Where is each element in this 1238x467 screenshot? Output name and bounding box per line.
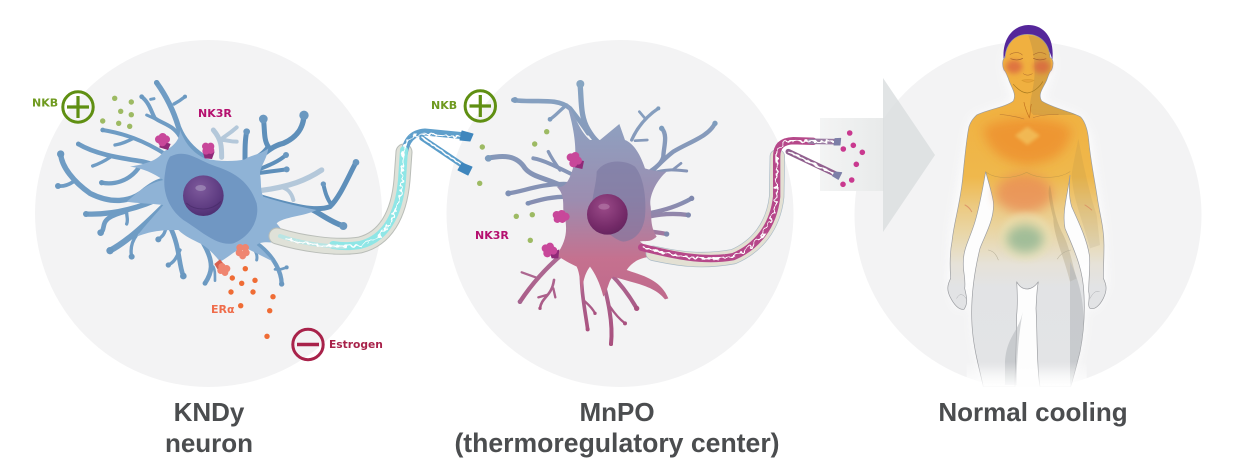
- cell body: [557, 103, 668, 299]
- cool belly glow: [1000, 213, 1052, 261]
- label: ERα: ERα: [211, 303, 235, 316]
- label: NK3R: NK3R: [475, 229, 509, 242]
- panel: MnPO background circle: [446, 40, 794, 387]
- dendrite terminals: [55, 80, 359, 287]
- cell body: [127, 130, 317, 262]
- soft halo: [948, 42, 1107, 385]
- receptor: ERα: [214, 244, 250, 276]
- heading: KNDy neuron: neuron: [165, 428, 253, 458]
- dots: NKB released: [477, 129, 549, 243]
- axon: MnPO neuron: [642, 138, 842, 260]
- bottom fade: [967, 362, 1087, 390]
- nucleus: [587, 194, 628, 235]
- cheeks: [1006, 60, 1050, 73]
- cell body shadow: [164, 154, 257, 244]
- heading: MnPO: MnPO: [579, 397, 655, 427]
- dendrites: [487, 83, 715, 344]
- heading: Normal cooling: Normal cooling: [938, 397, 1128, 427]
- body shading: [1028, 36, 1100, 282]
- icon: plus: [63, 92, 93, 122]
- leg shadow: [1005, 262, 1084, 387]
- icon: plus: [465, 91, 495, 121]
- cooling body figure: [948, 25, 1107, 390]
- faded background dendrites: [213, 127, 322, 200]
- label: NKB: NKB: [431, 99, 457, 112]
- dots: estrogen: [228, 266, 276, 339]
- panel: KNDy neuron background circle: [35, 40, 382, 387]
- dots: released signal: [840, 130, 865, 187]
- heading: KNDy neuron: KNDy: [174, 397, 244, 427]
- receptor: NK3R: [155, 133, 215, 159]
- hair: [1003, 25, 1053, 60]
- dots: NKB: [100, 96, 134, 129]
- dendrites: [58, 83, 287, 284]
- label: Estrogen: Estrogen: [329, 338, 383, 351]
- warm chest: [983, 119, 1072, 165]
- cell body shadow: [592, 161, 645, 242]
- receptor: NK3R: [542, 152, 584, 258]
- label: NKB: NKB: [32, 96, 58, 110]
- heading: MnPO: (thermoregulatory center): [454, 428, 780, 458]
- arrow: signal to body: [820, 78, 935, 232]
- cool belly green: [1006, 225, 1044, 253]
- dendrite terminals: [485, 80, 718, 346]
- sternum highlight: [1015, 127, 1040, 145]
- facial features: [957, 53, 1099, 298]
- panel: normal cooling background circle: [854, 42, 1202, 388]
- nucleus: [183, 175, 224, 216]
- label: NK3R: NK3R: [198, 107, 232, 120]
- silhouette: [948, 34, 1106, 387]
- warm stomach: [996, 174, 1052, 213]
- icon: minus: [293, 329, 323, 360]
- KNDy neuron illustration: [55, 80, 359, 287]
- axon: KNDy neuron: [277, 131, 473, 247]
- MnPO neuron illustration: [485, 80, 718, 346]
